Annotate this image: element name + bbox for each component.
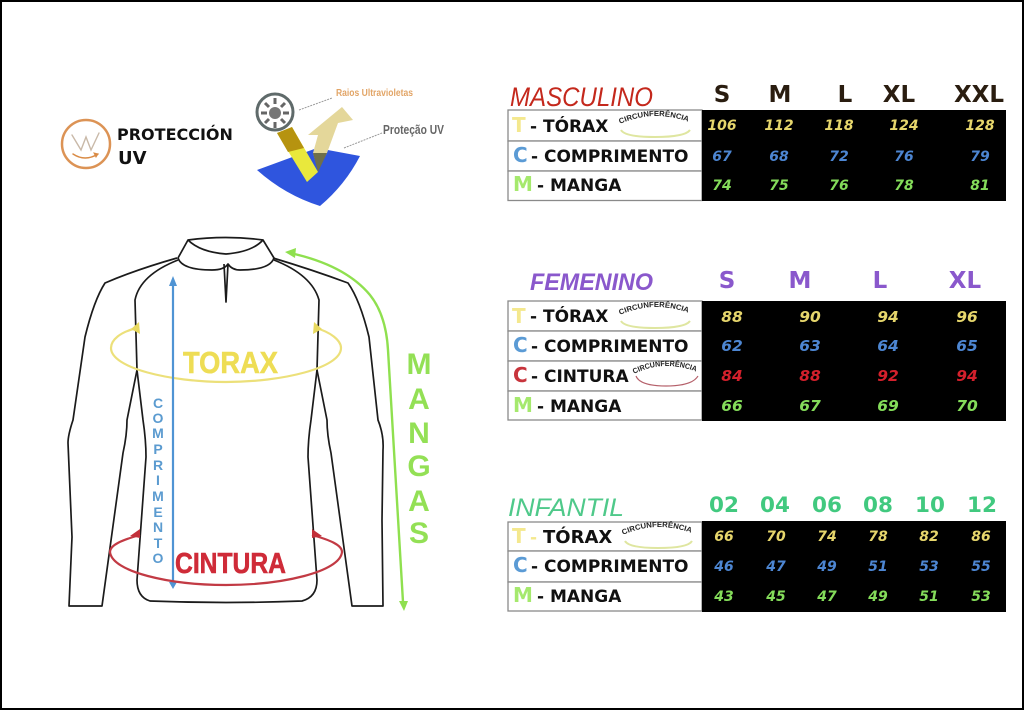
row: torax [512, 301, 978, 329]
size headers: 06 [812, 493, 842, 518]
row: comprimento: 65 [956, 337, 978, 355]
size headers: M [769, 82, 791, 108]
row: torax: T [512, 113, 526, 137]
row: comprimento: 49 [816, 559, 837, 575]
row: torax: 70 [766, 529, 786, 545]
row: torax: 96 [956, 308, 978, 326]
label box [508, 110, 702, 200]
row: comprimento: 76 [894, 149, 914, 165]
row: torax: 124 [889, 118, 919, 134]
row: comprimento: 68 [769, 149, 789, 165]
row: cintura: 84 [721, 367, 743, 385]
sleeve arrow [285, 248, 408, 611]
label box [508, 301, 702, 420]
row: torax: 88 [721, 308, 743, 326]
row: torax: 106 [707, 118, 737, 134]
row: comprimento: C [513, 553, 528, 577]
row: comprimento: 63 [799, 337, 821, 355]
row: torax: T [512, 304, 526, 328]
row: comprimento: 55 [971, 559, 991, 575]
row: cintura: C [513, 363, 528, 387]
icon: UV protection logo [62, 120, 110, 168]
row: manga: 76 [829, 178, 849, 194]
panel: infantil [507, 493, 1006, 612]
size headers: S [714, 82, 730, 108]
row: torax: 86 [971, 529, 991, 545]
shirt diagram [68, 238, 432, 611]
row: torax: 118 [824, 118, 854, 134]
row: comprimento: 46 [713, 559, 734, 575]
row: cintura: 88 [799, 367, 821, 385]
size headers: XL [949, 268, 982, 294]
row: comprimento: 64 [877, 337, 899, 355]
row: torax: 74 [817, 529, 837, 545]
row: manga: 67 [799, 397, 821, 415]
size headers [709, 493, 997, 518]
label: protection: Proteção UV [383, 122, 444, 137]
black value area [702, 301, 1006, 421]
length vertical label: I [156, 472, 160, 488]
heading: Protección UV: UV [118, 148, 147, 169]
row: manga: M [513, 583, 533, 607]
black value area [702, 521, 1006, 612]
row: cintura: 92 [877, 367, 899, 385]
sleeve vertical label: A [408, 383, 430, 416]
row: manga: 78 [894, 178, 914, 194]
sleeve vertical label: A [408, 485, 430, 518]
title: INFANTIL [508, 494, 624, 522]
row: cintura: CIRCUNFERÊNCIA [632, 360, 696, 374]
size headers: L [838, 82, 853, 108]
row: manga [513, 393, 978, 417]
label line: rays [299, 98, 332, 110]
row: manga: 81 [970, 178, 990, 194]
row: comprimento: 47 [765, 559, 786, 575]
row: comprimento: - COMPRIMENTO [531, 557, 688, 577]
row: comprimento [513, 553, 991, 577]
size headers: M [789, 268, 811, 294]
black value area [702, 110, 1006, 201]
icon: sun [257, 94, 293, 130]
row: torax: - TÓRAX [530, 305, 608, 327]
length arrow [169, 276, 177, 589]
row: manga: - MANGA [537, 397, 622, 417]
row: comprimento [513, 143, 990, 167]
size headers: 04 [760, 493, 790, 518]
row: manga: M [513, 393, 533, 417]
row: manga: 53 [971, 589, 991, 605]
row: comprimento: 53 [919, 559, 939, 575]
row: torax: 128 [965, 118, 995, 134]
length vertical label: M [152, 425, 164, 441]
row: torax: 66 [714, 529, 734, 545]
shirt outline [68, 238, 383, 606]
length vertical label: R [153, 457, 163, 473]
size headers [714, 82, 1004, 108]
row: comprimento: C [513, 333, 528, 357]
row: manga: 45 [765, 589, 786, 605]
sleeve vertical label: S [409, 517, 429, 550]
chest measure: TORAX [183, 345, 278, 380]
row: torax: 94 [877, 308, 899, 326]
panel: femenino [507, 268, 1006, 421]
row: torax: 78 [868, 529, 888, 545]
row: comprimento: 51 [868, 559, 888, 575]
row: comprimento: - COMPRIMENTO [531, 337, 688, 357]
row: cintura: - CINTURA [531, 367, 629, 387]
row: torax: T [512, 524, 526, 548]
row: torax: 82 [919, 529, 939, 545]
row: torax: CIRCUNFERÊNCIA [619, 301, 688, 314]
row: manga: 47 [816, 589, 837, 605]
size headers [719, 268, 982, 294]
length vertical label: N [153, 519, 163, 535]
size headers: 08 [863, 493, 893, 518]
row: manga: 70 [956, 397, 978, 415]
row: cintura: 94 [956, 367, 978, 385]
label box [508, 522, 702, 611]
row: manga: 49 [867, 589, 888, 605]
row: manga: - MANGA [537, 176, 622, 196]
size headers: 02 [709, 493, 739, 518]
length vertical label: O [153, 550, 164, 566]
row: comprimento: 72 [829, 149, 849, 165]
row: torax: CIRCUNFERÊNCIA [619, 110, 688, 124]
row: comprimento: C [513, 143, 528, 167]
row: manga [513, 172, 990, 196]
row: torax: 90 [799, 308, 821, 326]
size headers: XXL [954, 82, 1004, 108]
row: comprimento: 79 [970, 149, 990, 165]
waist measure [110, 529, 342, 585]
fabric [257, 148, 360, 206]
row: manga [513, 583, 991, 607]
row: torax [512, 521, 991, 549]
row: comprimento: 62 [721, 337, 743, 355]
title: FEMENINO [530, 269, 653, 296]
row: torax: - TÓRAX [530, 115, 608, 137]
heading: Protección UV: PROTECCIÓN [117, 125, 233, 144]
sleeve vertical label: G [407, 450, 431, 483]
row: torax [512, 110, 995, 138]
row: manga: 74 [712, 178, 732, 194]
label line: protection [344, 133, 382, 148]
size headers: L [873, 268, 888, 294]
length vertical label: T [154, 535, 163, 551]
row: torax: TÓRAX [543, 526, 612, 548]
sleeve vertical label: N [408, 417, 430, 450]
row: manga: - MANGA [537, 587, 622, 607]
row: torax: 112 [764, 118, 794, 134]
ultraviolet beam [277, 127, 318, 182]
row: comprimento: 67 [712, 149, 732, 165]
row: torax: CIRCUNFERÊNCIA [622, 521, 691, 534]
row: manga: 51 [919, 589, 939, 605]
size headers: 12 [967, 493, 997, 518]
row: manga: 69 [877, 397, 899, 415]
row: manga: 43 [713, 589, 734, 605]
waist measure: CINTURA [175, 548, 286, 580]
length vertical label: O [153, 410, 164, 426]
panel: masculino [507, 82, 1006, 202]
reflected ray arrow [308, 107, 353, 170]
label: rays: Raios Ultravioletas [336, 88, 413, 99]
length vertical label: C [153, 395, 163, 411]
length vertical label: M [152, 488, 164, 504]
row: cintura [513, 360, 978, 387]
row: comprimento: - COMPRIMENTO [531, 147, 688, 167]
row: comprimento [513, 333, 978, 357]
length vertical label: E [153, 504, 163, 520]
row: torax: - [530, 528, 537, 548]
sleeve vertical label: M [406, 348, 432, 381]
row: manga: 75 [769, 178, 789, 194]
size headers: XL [883, 82, 916, 108]
size headers: 10 [915, 493, 945, 518]
diagram: UV protection fabric [257, 88, 444, 206]
row: manga: M [513, 172, 533, 196]
chest measure [111, 322, 341, 382]
row: manga: 66 [721, 397, 743, 415]
size headers: S [719, 268, 735, 294]
length vertical label: P [153, 441, 163, 457]
title: MASCULINO [510, 82, 653, 112]
